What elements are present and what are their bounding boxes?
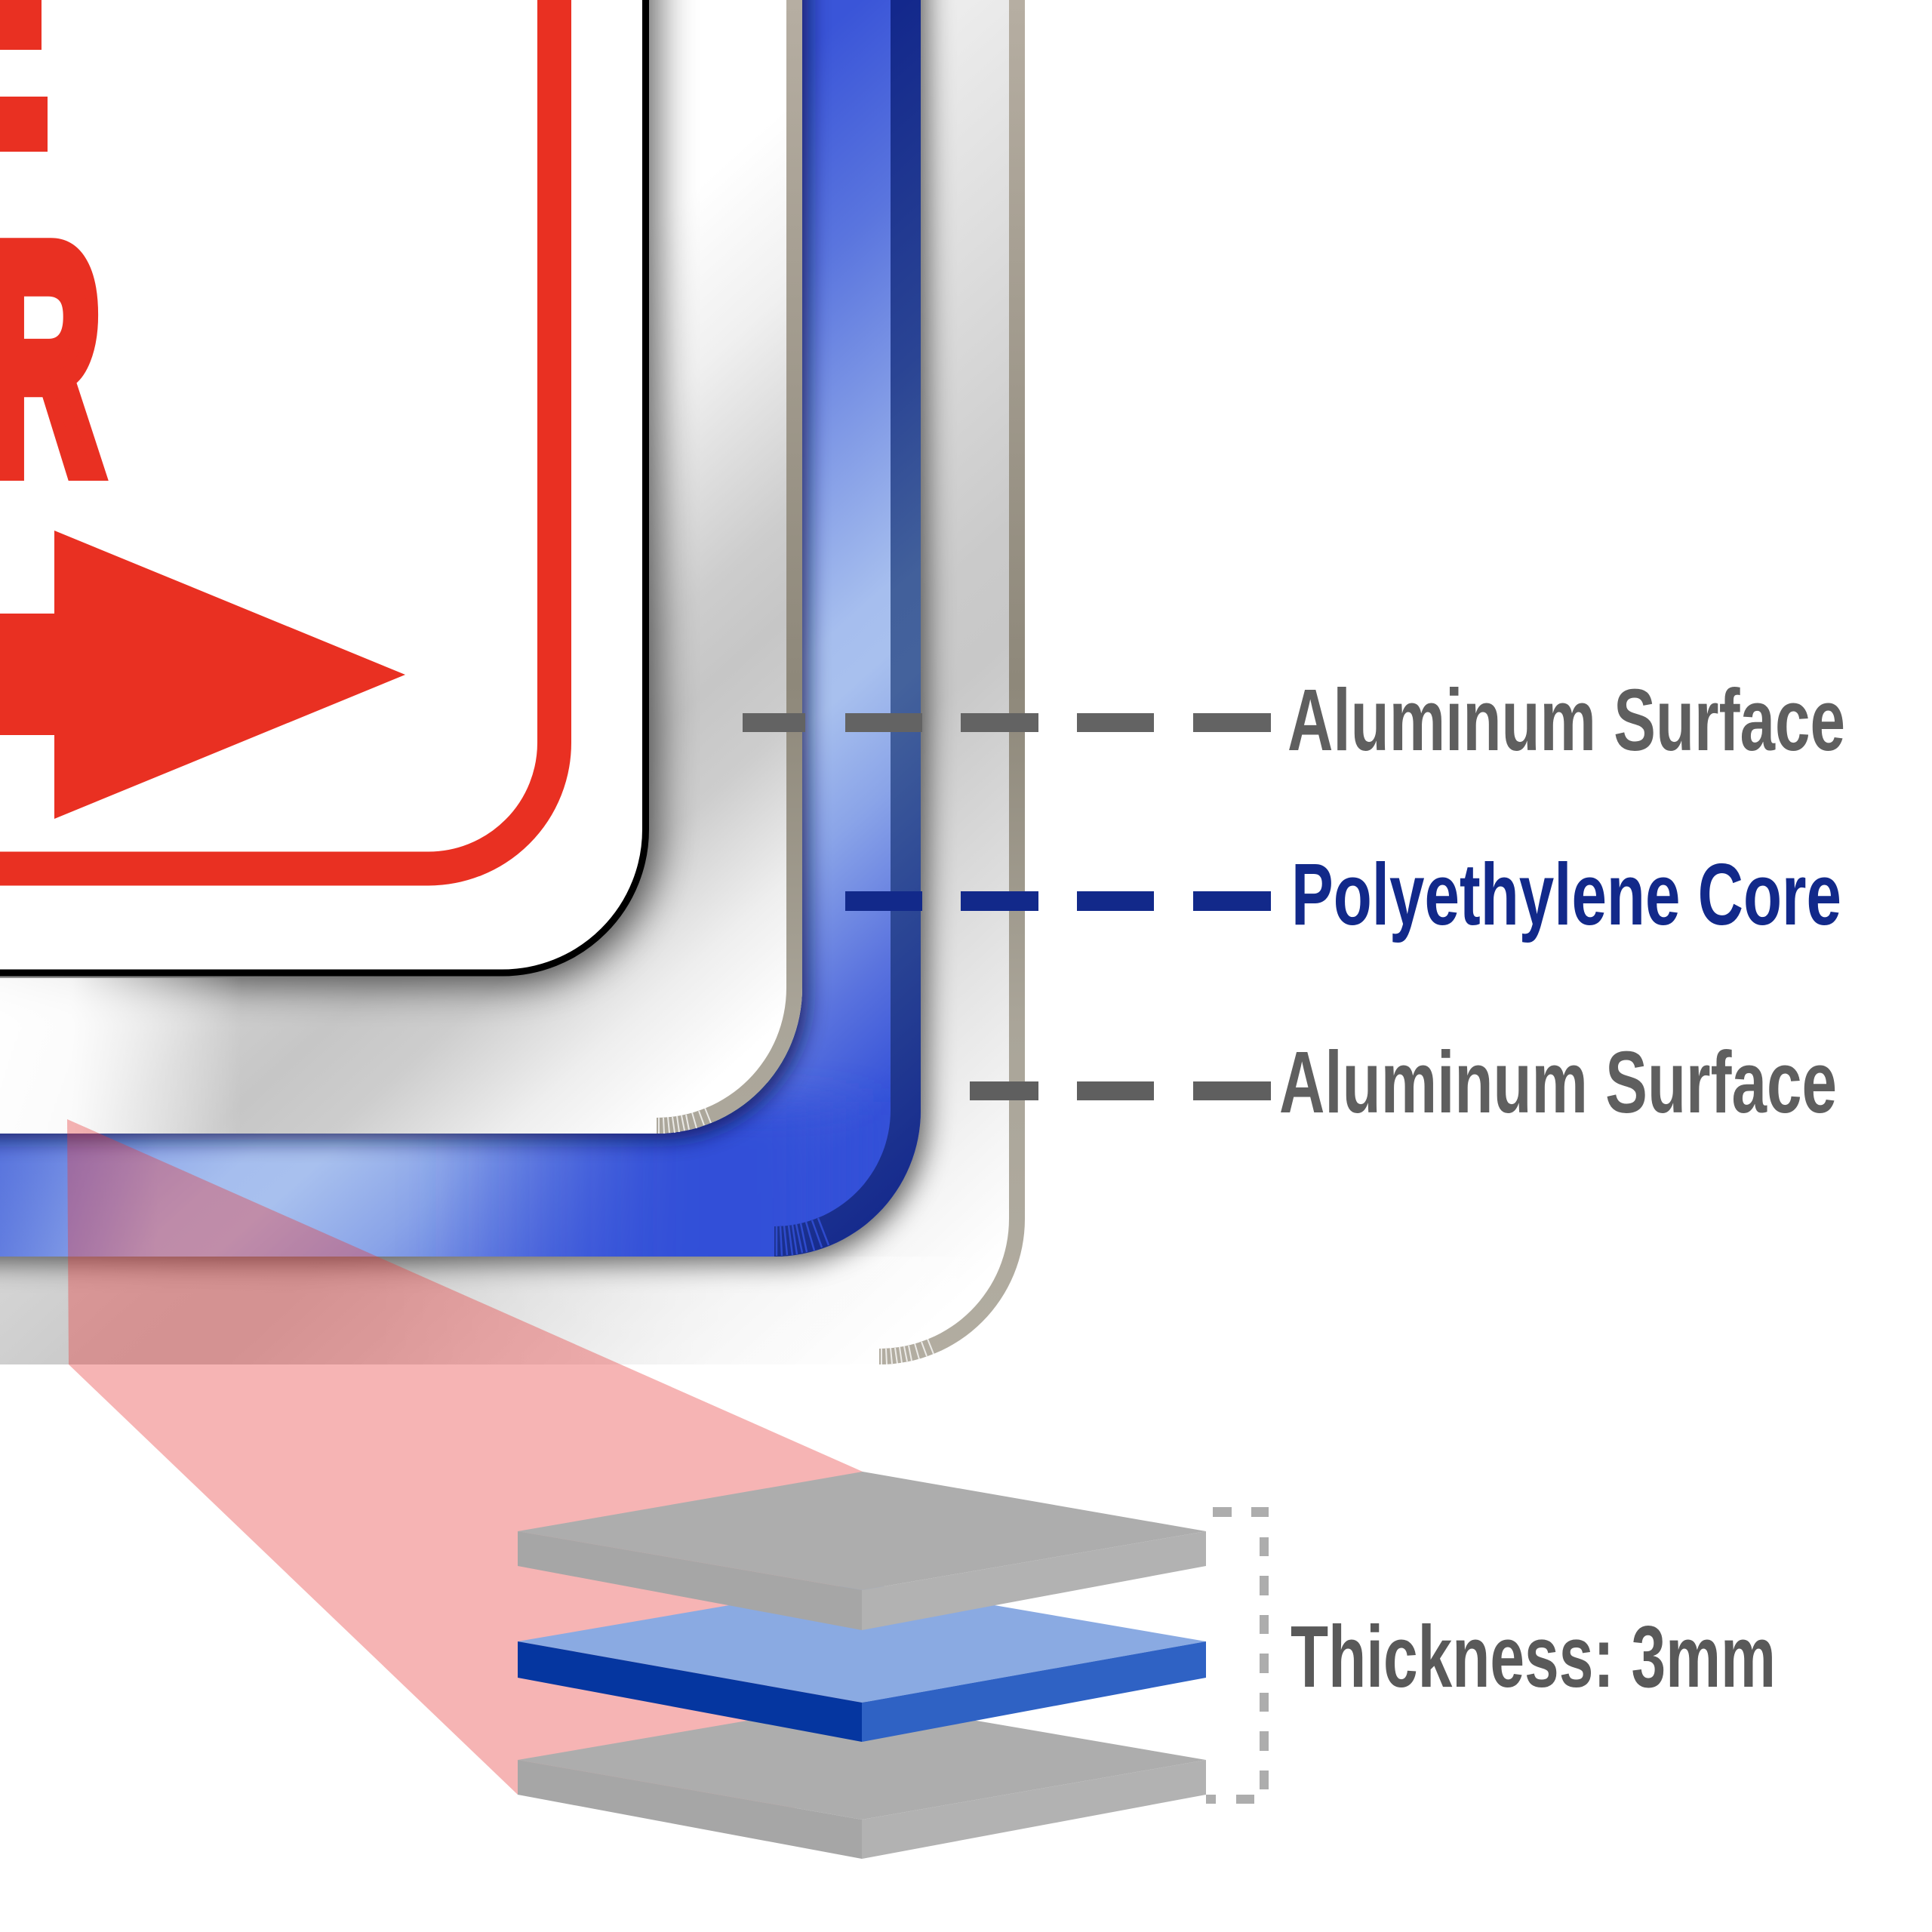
core edge fray marks: [777, 1218, 829, 1256]
panel: printed sign face: [0, 0, 646, 973]
layer: blue core sheet: [518, 1583, 1206, 1742]
leader: top aluminum surface: [743, 713, 1271, 732]
front surface edge: [657, 0, 802, 1134]
rear surface lower highlight: [377, 1219, 1009, 1364]
sign letter fragments: [0, 0, 48, 152]
panel: blue polyethylene core: [0, 0, 921, 1298]
layer: top aluminum sheet: [518, 1472, 1206, 1630]
rear edge fray marks: [881, 1339, 934, 1364]
zoom projection: translucent red wedge: [67, 1119, 863, 1811]
shadow: core onto rear surface: [0, 0, 927, 1263]
bracket: thickness dashed outline: [1206, 1507, 1269, 1804]
panel: front aluminum surface: [0, 0, 802, 1134]
layer: bottom aluminum sheet: [518, 1701, 1206, 1859]
sign red border: [0, 0, 554, 869]
front edge fray marks: [659, 1108, 711, 1134]
rear surface edge: [879, 0, 1025, 1364]
core lower run shade: [435, 1091, 823, 1257]
core dark edge: [774, 0, 921, 1257]
leader: polyethylene core: [845, 891, 1271, 911]
core left shade: [0, 1133, 158, 1257]
leader: bottom aluminum surface: [970, 1081, 1271, 1100]
panel: rear aluminum surface: [0, 0, 1025, 1364]
sign red arrow: [0, 531, 405, 819]
shadow: front surface onto core: [0, 0, 808, 1140]
shadow: sign onto front surface: [0, 0, 657, 983]
highlight: fade at lower left of front surface: [0, 978, 242, 1134]
